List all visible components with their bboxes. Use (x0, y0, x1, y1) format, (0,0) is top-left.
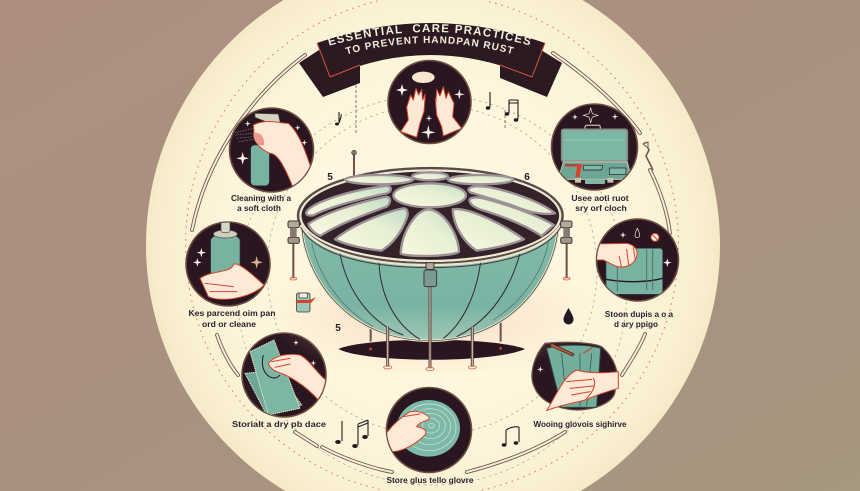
title text: ESSENTIAL CARE PRACTICES (328, 24, 531, 46)
cream circular panel (146, 0, 720, 491)
small rust remover bottle (296, 293, 316, 312)
label: use anti rust dry cloth: sry orf cloch (575, 203, 627, 213)
title banner: TO PREVENT HANDPAN RUST (345, 36, 514, 54)
label: store in a dry place: Stoon dupis a o a (605, 310, 673, 319)
label: cleaning with a soft cloth: a soft cloth (237, 204, 281, 213)
curved rod arrows (192, 53, 670, 472)
icon: disc with hand (385, 388, 472, 472)
title banner (299, 23, 562, 97)
glow beneath handpan (266, 253, 596, 377)
icon: pail and hands (532, 342, 618, 411)
label: keep pan ordered or clean: ord or cleane (202, 319, 256, 329)
step numbers: 6 (524, 172, 530, 183)
icon: spray bottle (230, 108, 314, 192)
handpan illustration (288, 150, 572, 371)
rim and pads (298, 168, 563, 268)
decorative arcs (186, 1, 678, 490)
music notes (335, 92, 519, 448)
icon: open storage case (552, 104, 638, 190)
shadow (338, 340, 525, 360)
label: keep pan ordered or clean: Kes parcend oim pan (189, 308, 275, 318)
label: cleaning with a soft cloth: Cleaning with a (231, 194, 291, 203)
label: use anti rust dry cloth: Usee aoti ruot (571, 193, 629, 203)
label: store in a dry place: Storialt a dry pb dace (232, 419, 326, 429)
icon: hands with cloth (388, 60, 471, 144)
step numbers (327, 172, 530, 334)
legs and bolts (288, 221, 572, 371)
back legs (352, 150, 501, 342)
icon: hand carrying case (593, 219, 678, 301)
icon: cloth wiping (242, 333, 326, 417)
step numbers: 5 (335, 323, 341, 334)
icon: bottle held in hand (186, 222, 270, 306)
water drop (564, 308, 574, 324)
label: wearing gloves: Wooing glovois sighirve (534, 419, 627, 429)
step numbers: 5 (327, 172, 333, 183)
label: store in a dry place: d ary ppigo (614, 320, 658, 329)
label: store gloves: Store glus tello glovre (386, 475, 474, 485)
bowl body (302, 227, 558, 341)
